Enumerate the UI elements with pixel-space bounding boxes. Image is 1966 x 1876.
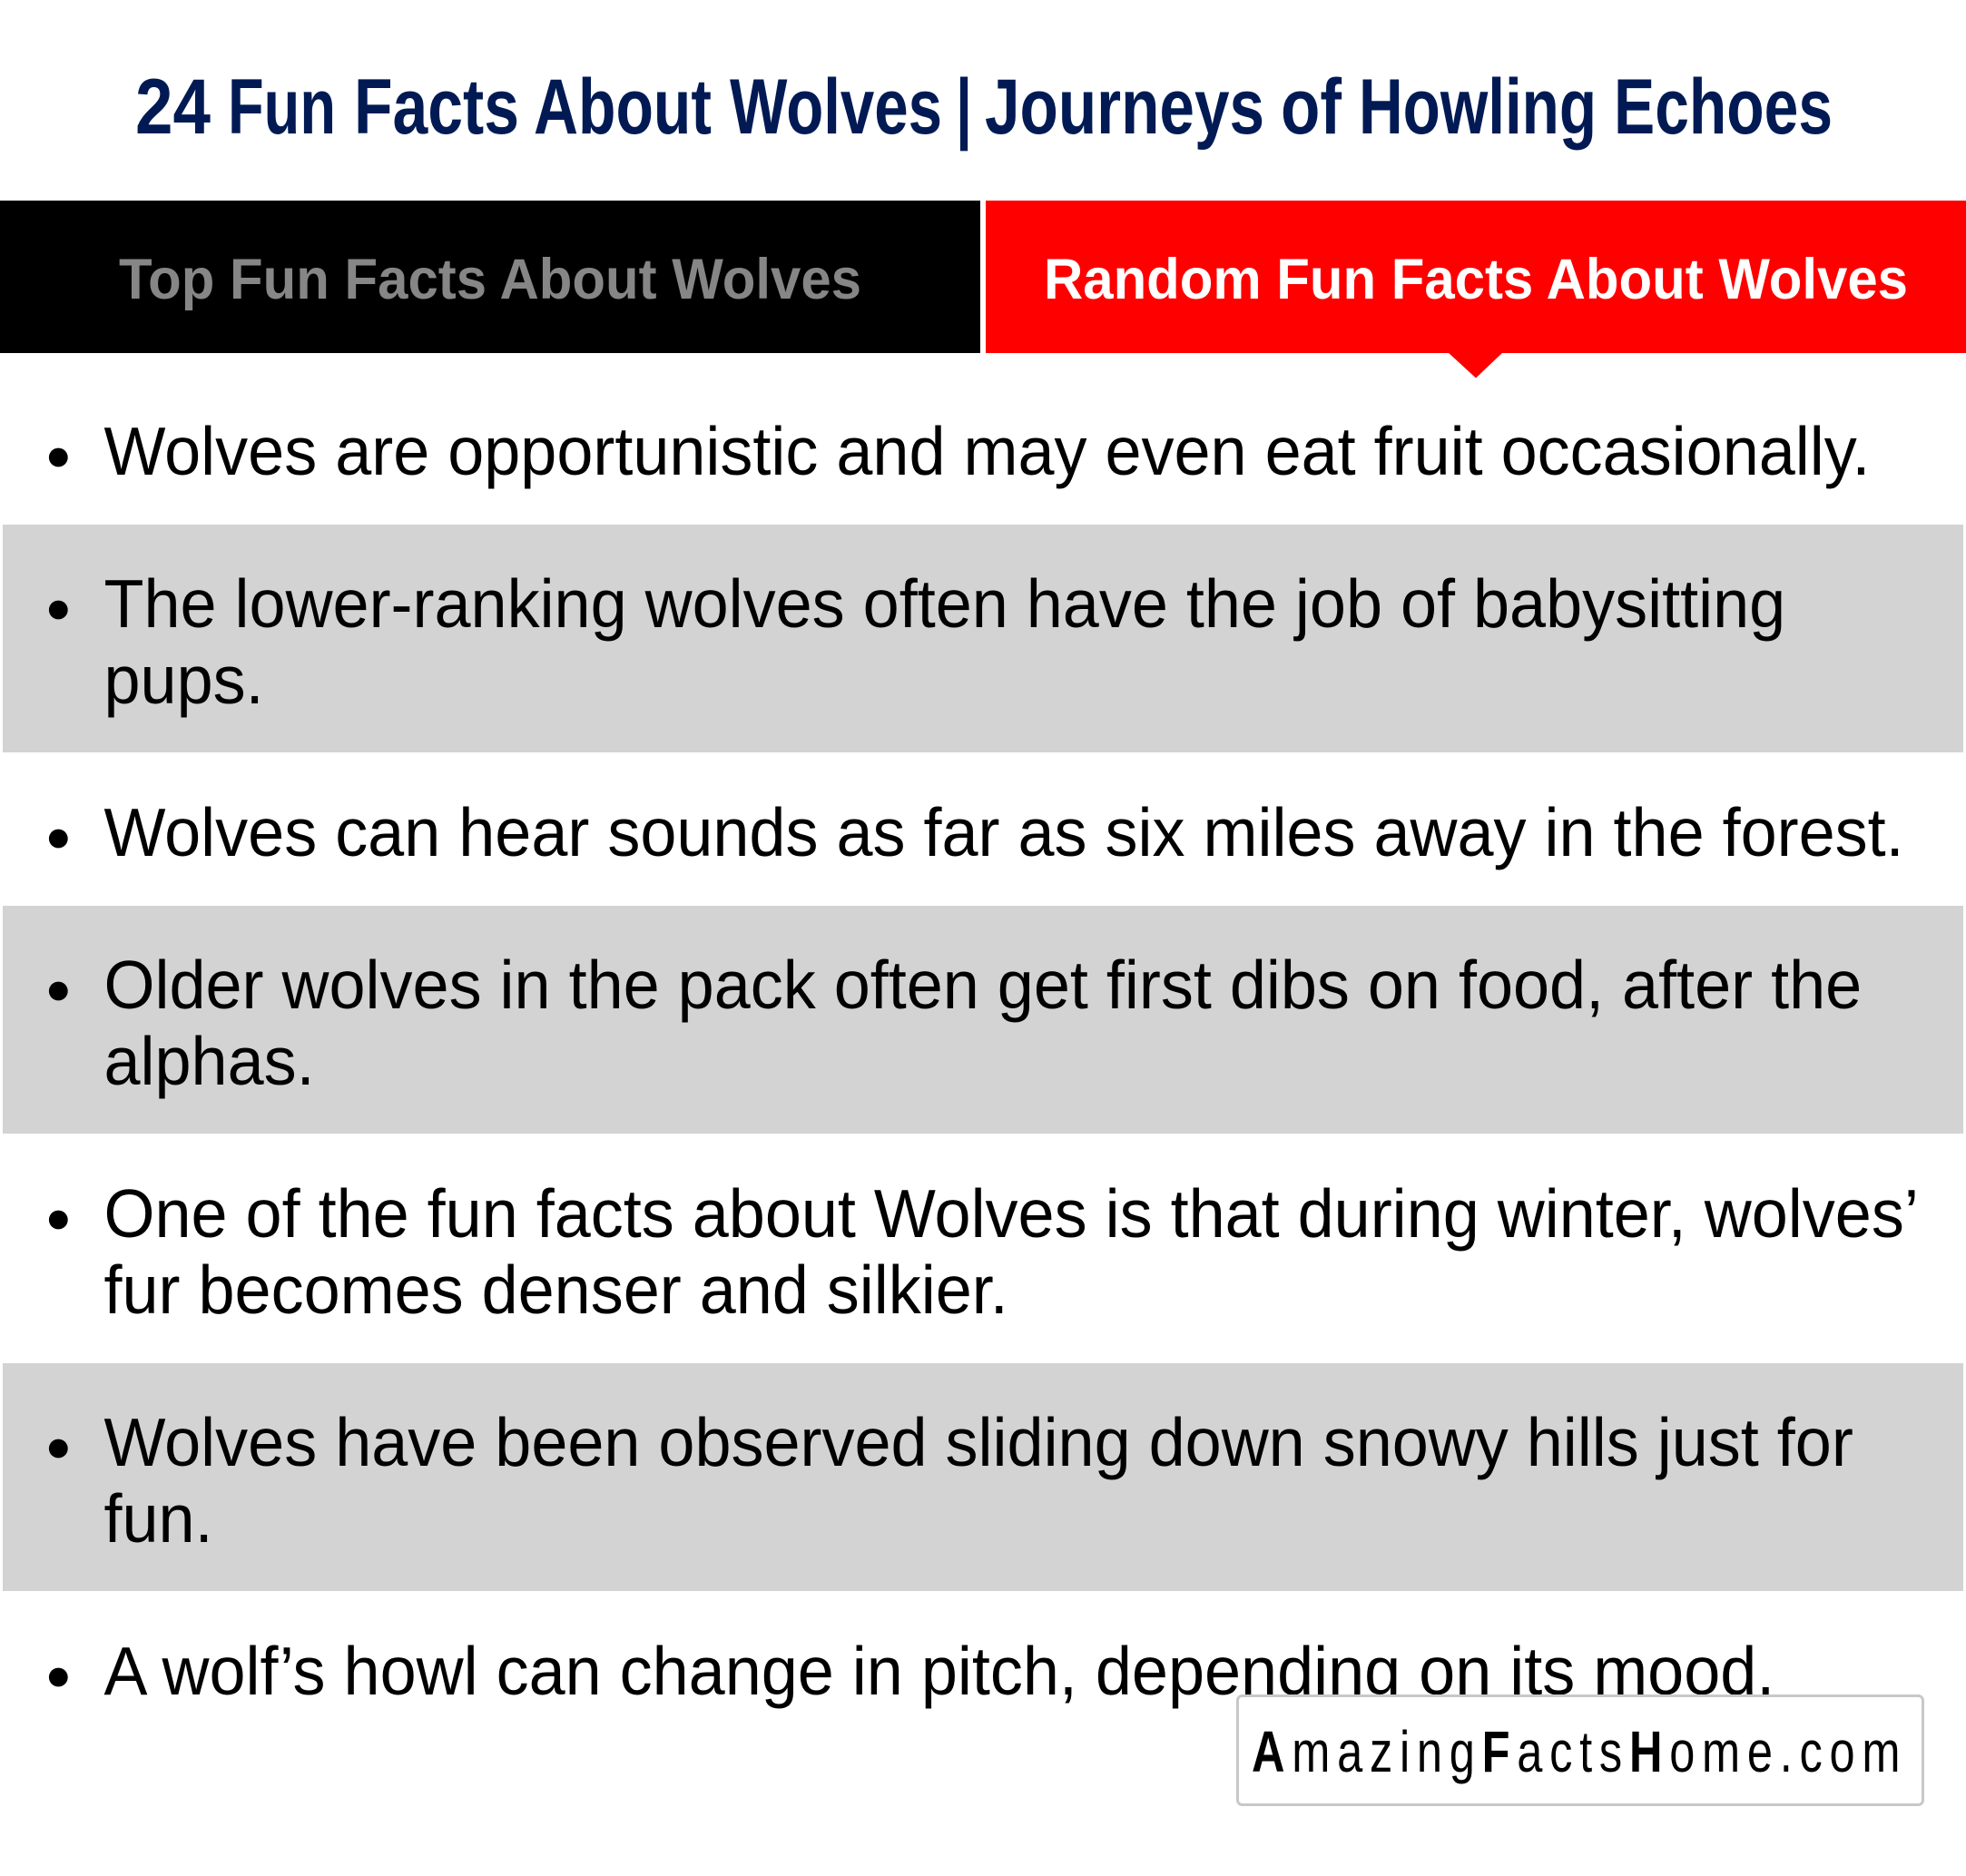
tab: top fun facts: Top Fun Facts About Wolves	[119, 248, 861, 311]
title: About	[534, 64, 712, 151]
fact row 2	[3, 525, 1963, 752]
title: Fun	[228, 64, 336, 151]
fact row 3: Wolves can hear sounds as far as six miles away in the forest.	[103, 794, 1904, 870]
title: 24	[135, 64, 211, 151]
title: Howling	[1359, 64, 1597, 151]
fact row 2: The lower-ranking wolves often have the job of babysitting	[103, 565, 1785, 642]
fact row 5: fur becomes denser and silkier.	[103, 1252, 1008, 1328]
title	[135, 64, 1833, 151]
watermark box	[1238, 1695, 1922, 1804]
fact row 5: One of the fun facts about Wolves is that during winter, wolves’	[103, 1175, 1919, 1252]
fact row 6: fun.	[103, 1480, 213, 1557]
fact row 7: A wolf’s howl can change in pitch, depending on its mood.	[103, 1633, 1774, 1709]
fact row 6	[3, 1363, 1963, 1591]
fact row 1: Wolves are opportunistic and may even eat fruit occasionally.	[103, 413, 1870, 489]
watermark box: AmazingFactsHome.com	[1252, 1720, 1907, 1784]
title: Wolves	[730, 64, 942, 151]
fact row 4: Older wolves in the pack often get first dibs on food, after the	[103, 947, 1862, 1023]
tab: random fun facts	[986, 201, 1966, 378]
fact row 4: alphas.	[103, 1023, 315, 1099]
title: Facts	[354, 64, 519, 151]
title: |	[956, 64, 972, 151]
fact row 2: pups.	[103, 642, 264, 718]
fact row 4	[3, 906, 1963, 1134]
fact row 5	[49, 1175, 1919, 1328]
title: Journeys	[985, 64, 1264, 151]
tab: random fun facts: Random Fun Facts About Wolves	[1044, 248, 1908, 311]
tab: top fun facts	[0, 201, 980, 353]
title: of	[1281, 64, 1342, 151]
title: Echoes	[1614, 64, 1833, 151]
fact row 6: Wolves have been observed sliding down snowy hills just for	[103, 1404, 1853, 1480]
